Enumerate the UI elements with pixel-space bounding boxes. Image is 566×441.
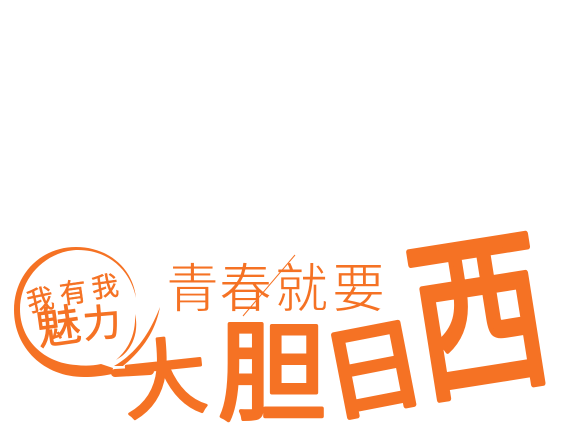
big title: 大胆晒, with the 日 and 西 parts of 晒 set at different sizes as in the lettering: 大 xyxy=(118,329,211,431)
big title: 大胆晒, with the 日 and 西 parts of 晒 set at different sizes as in the lettering: 西 xyxy=(397,211,561,427)
big title: 大胆晒, with the 日 and 西 parts of 晒 set at different sizes as in the lettering: 日 xyxy=(314,307,433,436)
big title: 大胆晒, with the 日 and 西 parts of 晒 set at different sizes as in the lettering xyxy=(118,211,561,436)
heading: 青春就要: 春 xyxy=(219,260,272,319)
heading: 青春就要: 就 xyxy=(275,260,328,319)
heading: 青春就要 xyxy=(166,260,385,319)
slash between words xyxy=(243,255,295,316)
badge text: 我有我魅力: 我 xyxy=(24,283,57,318)
badge text: 我有我魅力: 力 xyxy=(81,302,123,347)
badge text: 我有我魅力: 魅 xyxy=(34,300,84,355)
badge text: 我有我魅力: 我 xyxy=(90,270,121,304)
big title: 大胆晒, with the 日 and 西 parts of 晒 set at different sizes as in the lettering: 胆 xyxy=(218,313,326,434)
badge text: 我有我魅力: 有 xyxy=(58,276,89,310)
heading: 青春就要: 要 xyxy=(332,260,385,319)
heading: 青春就要: 青 xyxy=(166,260,219,319)
badge text: 我有我魅力 xyxy=(24,270,123,355)
badge: circular brush swirl xyxy=(14,247,160,377)
